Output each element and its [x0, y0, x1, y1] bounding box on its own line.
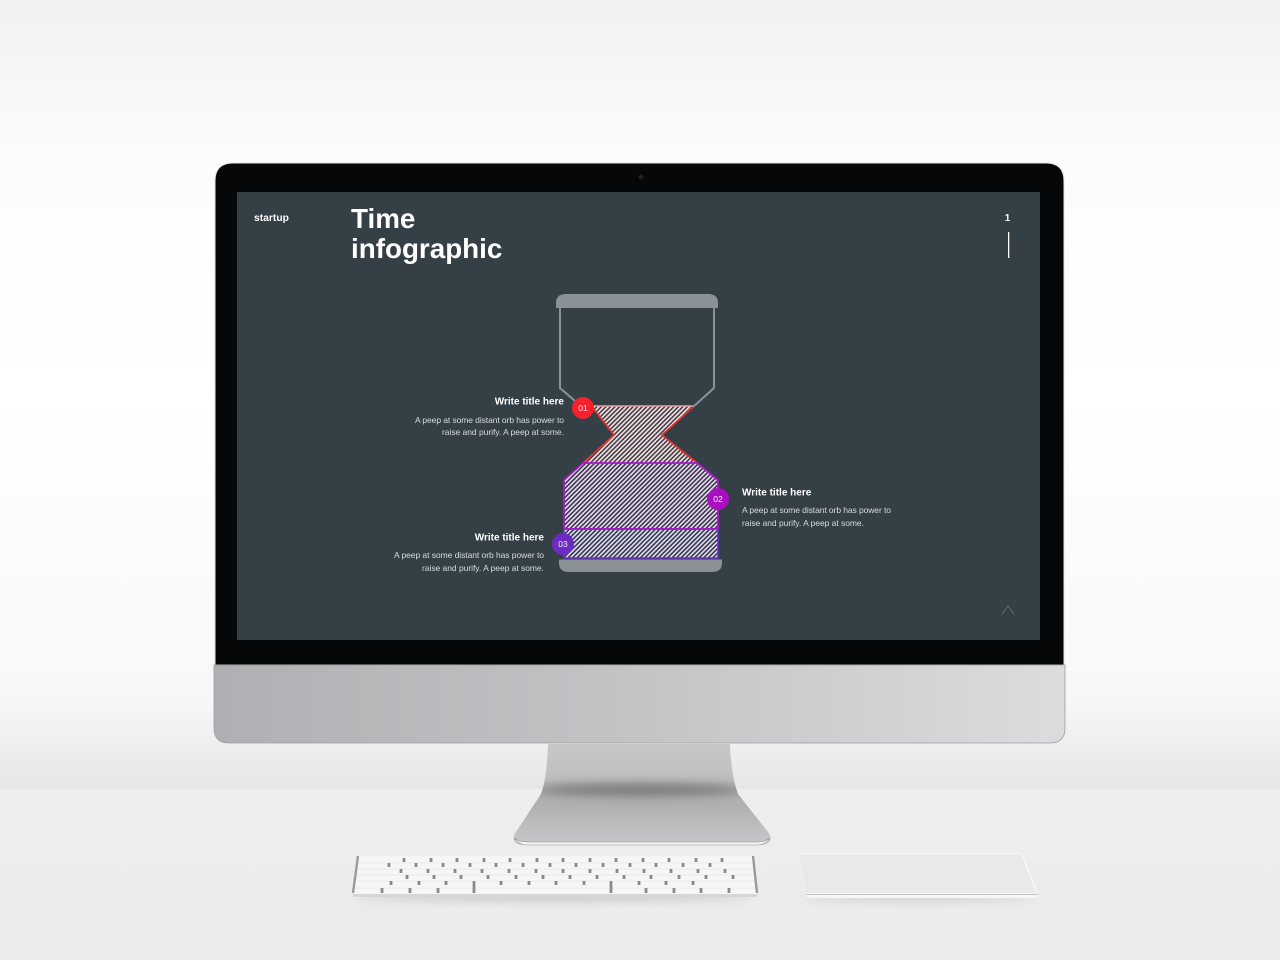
title: infographic [351, 233, 502, 264]
title: Time [351, 203, 415, 234]
text block 03 [394, 532, 544, 573]
text block 02: raise and purify. A peep at some. [742, 518, 864, 528]
screen panel [237, 192, 1040, 640]
text block 02: Write title here [742, 487, 812, 498]
keyboard [353, 856, 757, 900]
hourglass segment 03: purple [564, 529, 718, 558]
hourglass top cap [556, 294, 718, 308]
text block 02 [742, 487, 891, 528]
text block 01 [415, 396, 564, 437]
hourglass chart [556, 294, 722, 572]
hourglass segment 01: red [583, 406, 697, 463]
page indicator line [1008, 232, 1009, 258]
webcam [638, 174, 644, 180]
marker 01 [572, 397, 594, 419]
text block 01: raise and purify. A peep at some. [442, 427, 564, 437]
text block 03: raise and purify. A peep at some. [422, 563, 544, 573]
page number: 1 [1005, 213, 1011, 224]
marker 02: 02 [713, 494, 723, 504]
text block 03: Write title here [475, 532, 544, 543]
text block 01: Write title here [495, 396, 564, 407]
monitor stand [514, 744, 770, 845]
brand label: startup [254, 213, 289, 224]
hourglass empty upper glass [560, 308, 714, 407]
marker 03 [552, 533, 574, 555]
hourglass segment 02: magenta [564, 463, 718, 529]
hourglass base [559, 560, 722, 572]
text block 01: A peep at some distant orb has power to [415, 415, 564, 425]
monitor body [214, 163, 1065, 743]
text block 03: A peep at some distant orb has power to [394, 550, 544, 560]
trackpad [797, 853, 1038, 901]
text block 02: A peep at some distant orb has power to [742, 505, 891, 515]
marker 02 [707, 488, 729, 510]
monitor chin [214, 665, 1065, 743]
icon: up chevron [1002, 606, 1014, 614]
marker 01: 01 [578, 403, 588, 413]
marker 03: 03 [558, 539, 568, 549]
